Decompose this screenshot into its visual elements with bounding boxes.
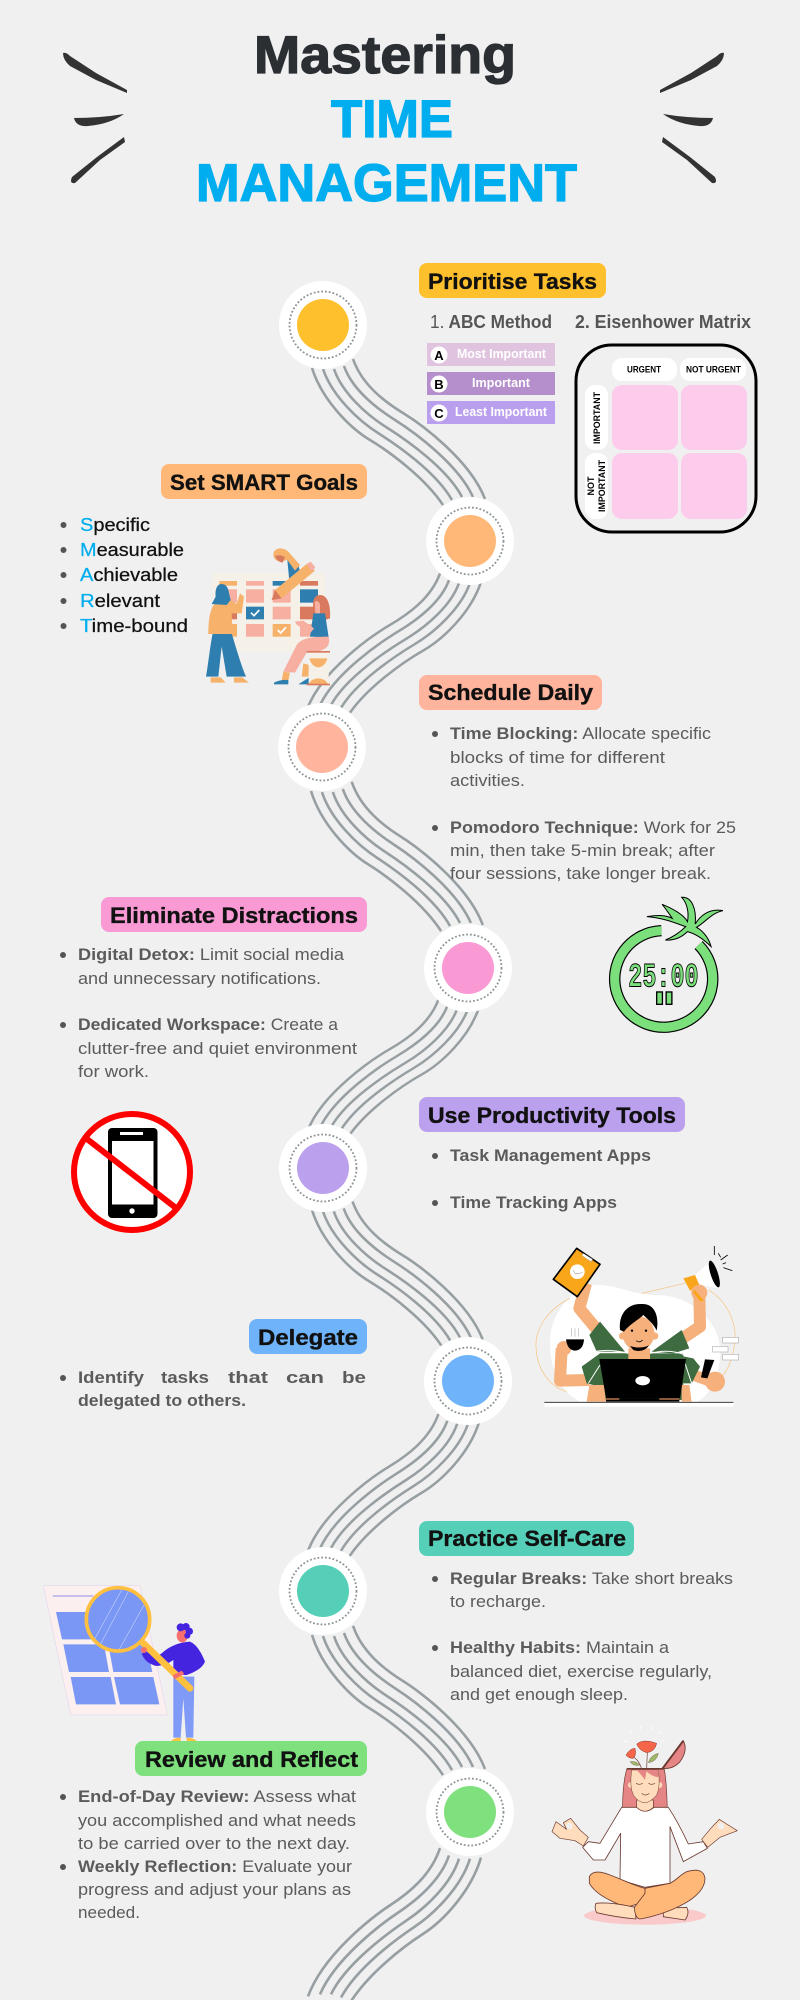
smart list: Measurable xyxy=(80,540,184,560)
abc method label: 1. ABC Method xyxy=(430,312,552,332)
delegate text: delegated to others. xyxy=(78,1392,246,1410)
delegate text: Identify xyxy=(78,1369,145,1387)
review text: progress and adjust your plans as xyxy=(78,1881,351,1899)
self-care text: Healthy Habits: Maintain a xyxy=(450,1639,670,1657)
eliminate text: clutter-free and quiet environment xyxy=(78,1040,357,1058)
panel: schedule daily xyxy=(419,675,736,1027)
tools text: Task Management Apps xyxy=(450,1147,651,1165)
abc bars xyxy=(427,343,555,424)
smart list xyxy=(60,515,188,636)
heading: use productivity tools xyxy=(419,1097,685,1132)
circle node 7 xyxy=(279,1547,367,1635)
tools text: Time Tracking Apps xyxy=(450,1194,617,1212)
schedule text xyxy=(432,725,736,883)
title: MANAGEMENT xyxy=(196,154,577,213)
abc bars: A xyxy=(434,348,444,363)
delegate text: that xyxy=(228,1369,269,1387)
abc bars: Most Important xyxy=(457,346,547,361)
review text: you accomplished and what needs xyxy=(78,1812,356,1830)
delegate text xyxy=(60,1369,366,1410)
delegate text: tasks xyxy=(161,1369,209,1387)
heading: delegate xyxy=(249,1319,367,1354)
tools text xyxy=(432,1147,651,1212)
eliminate text: Digital Detox: Limit social media xyxy=(78,946,345,964)
smart list: Relevant xyxy=(80,591,160,611)
self-care text xyxy=(432,1570,733,1704)
heading: set smart goals: Set SMART Goals xyxy=(170,470,358,495)
abc bars: B xyxy=(434,377,444,392)
illustration: meditating woman xyxy=(552,1726,737,1925)
circle node 4 xyxy=(424,924,512,1012)
heading: eliminate distractions xyxy=(101,897,367,932)
self-care text: and get enough sleep. xyxy=(450,1686,628,1704)
heading: practice self-care: Practice Self-Care xyxy=(428,1526,626,1551)
heading: delegate: Delegate xyxy=(258,1325,358,1350)
schedule text: Pomodoro Technique: Work for 25 xyxy=(450,819,736,837)
circle node 2 xyxy=(426,497,514,585)
heading: review and reflect: Review and Reflect xyxy=(145,1747,359,1772)
circle node 5 xyxy=(279,1124,367,1212)
schedule text: blocks of time for different xyxy=(450,749,665,767)
circle node 1 xyxy=(279,281,367,369)
panel: set smart goals xyxy=(60,464,367,685)
eisenhower matrix: URGENT xyxy=(627,364,661,374)
title: Mastering xyxy=(254,26,516,85)
heading: set smart goals xyxy=(161,464,367,499)
abc bars: C xyxy=(434,406,444,421)
panel: eliminate distractions xyxy=(60,897,367,1230)
illustration: man with magnifying glass xyxy=(43,1586,205,1742)
abc bars: Least Important xyxy=(455,404,548,419)
heading: review and reflect xyxy=(135,1741,367,1776)
heading: prioritise tasks xyxy=(419,263,606,298)
icon: no phone xyxy=(74,1114,190,1230)
circle node 3 xyxy=(278,703,366,791)
smart list: Achievable xyxy=(80,565,178,585)
eisenhower matrix: IMPORTANT xyxy=(592,392,602,444)
panel: practice self-care xyxy=(419,1521,737,1925)
icon: tomato timer xyxy=(615,897,723,1027)
eliminate text: for work. xyxy=(78,1063,149,1081)
title: TIME xyxy=(331,90,453,149)
heading: use productivity tools: Use Productivity Tools xyxy=(428,1103,676,1128)
delegate text: can xyxy=(286,1369,324,1387)
panel: prioritise tasks xyxy=(419,263,756,532)
eisenhower matrix: NOT xyxy=(586,476,596,496)
schedule text: Time Blocking: Allocate specific xyxy=(450,725,711,743)
icon: right brush strokes xyxy=(660,53,724,183)
heading: eliminate distractions: Eliminate Distractions xyxy=(110,903,358,928)
panel: review and reflect xyxy=(43,1586,367,1922)
eliminate text xyxy=(60,946,357,1081)
self-care text: Regular Breaks: Take short breaks xyxy=(450,1570,733,1588)
heading: practice self-care xyxy=(419,1521,634,1556)
schedule text: activities. xyxy=(450,772,525,790)
heading: schedule daily xyxy=(419,675,602,710)
self-care text: to recharge. xyxy=(450,1593,546,1611)
smart list: Specific xyxy=(80,515,150,535)
icon: left brush strokes xyxy=(63,53,127,183)
abc bars: Important xyxy=(472,375,531,390)
icon: tomato timer: 25:00 xyxy=(628,959,699,998)
review text: Weekly Reflection: Evaluate your xyxy=(78,1858,353,1876)
eliminate text: and unnecessary notifications. xyxy=(78,970,321,988)
eisenhower matrix: IMPORTANT xyxy=(597,460,607,512)
illustration: team at calendar xyxy=(206,548,330,685)
heading: prioritise tasks: Prioritise Tasks xyxy=(428,269,597,294)
heading: schedule daily: Schedule Daily xyxy=(428,680,594,705)
review text: to be carried over to the next day. xyxy=(78,1835,350,1853)
title xyxy=(196,26,577,213)
eisenhower matrix xyxy=(576,345,756,532)
review text: End-of-Day Review: Assess what xyxy=(78,1788,356,1806)
circle node 6 xyxy=(424,1337,512,1425)
panel: delegate xyxy=(60,1319,367,1410)
winding road lines xyxy=(308,359,485,2000)
schedule text: min, then take 5-min break; after xyxy=(450,842,716,860)
illustration: multitasking person xyxy=(536,1246,739,1407)
self-care text: balanced diet, exercise regularly, xyxy=(450,1663,712,1681)
schedule text: four sessions, take longer break. xyxy=(450,865,711,883)
review text: needed. xyxy=(78,1904,140,1922)
review text xyxy=(60,1788,356,1922)
panel: use productivity tools xyxy=(419,1097,739,1407)
smart list: Time-bound xyxy=(80,616,188,636)
eisenhower matrix: NOT URGENT xyxy=(686,364,741,374)
eisenhower label: 2. Eisenhower Matrix xyxy=(575,312,751,332)
circle node 8 xyxy=(426,1768,514,1856)
eliminate text: Dedicated Workspace: Create a xyxy=(78,1016,339,1034)
delegate text: be xyxy=(342,1369,366,1387)
